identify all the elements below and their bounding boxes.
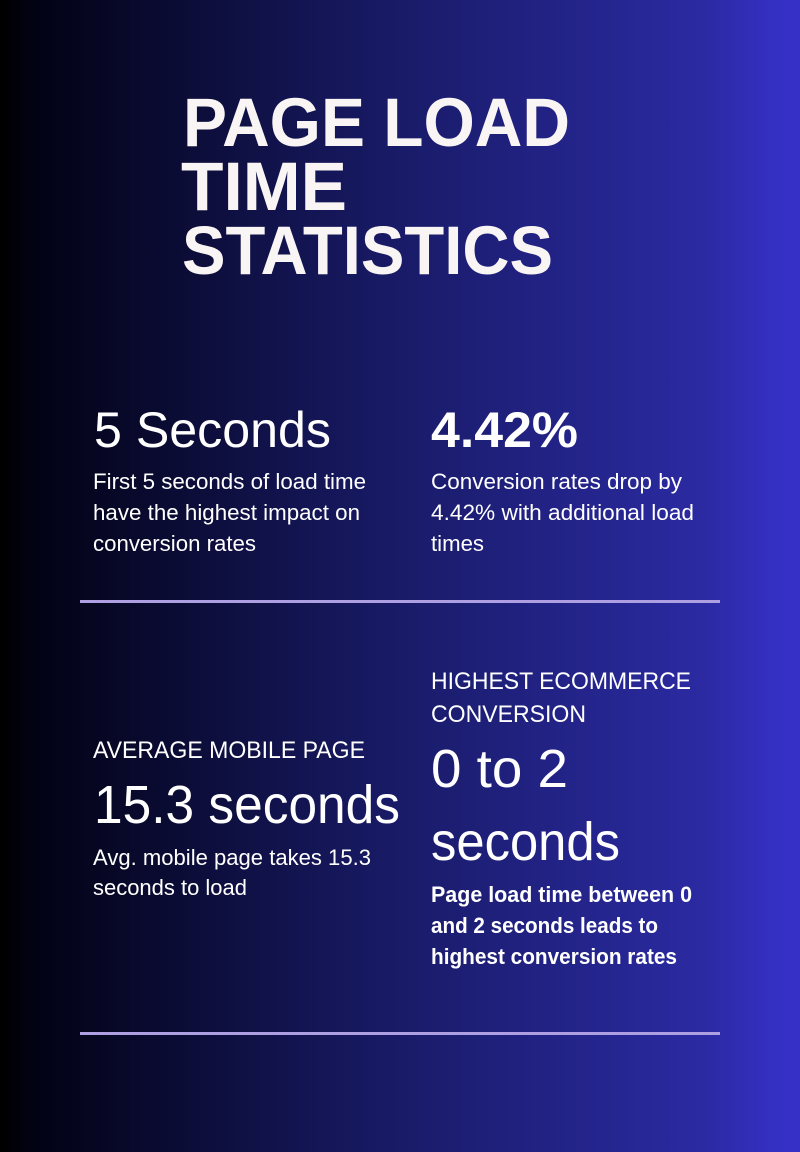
stat value: 0 to 2 seconds: [431, 739, 620, 872]
panel: average mobile page: [93, 737, 400, 900]
label: average mobile page: AVERAGE MOBILE PAGE: [93, 737, 365, 764]
description: first 5 seconds: have the highest impact on: [93, 500, 360, 525]
title: TIME: [181, 148, 347, 225]
description: conversion drop: Conversion rates drop by: [431, 469, 683, 494]
description: best load time: highest conversion rates: [431, 944, 677, 969]
description: conversion drop: 4.42% with additional load: [431, 500, 694, 525]
stat value: 0 to 2 seconds: 0 to 2: [431, 739, 568, 799]
divider: upper: [80, 600, 720, 603]
description: conversion drop: [431, 469, 694, 556]
description: best load time: and 2 seconds leads to: [431, 913, 658, 938]
stat value: 0 to 2 seconds: seconds: [431, 812, 620, 872]
panel: 5 seconds stat: [93, 402, 366, 556]
description: first 5 seconds: First 5 seconds of load time: [93, 469, 366, 494]
description: mobile load: seconds to load: [93, 875, 247, 900]
description: first 5 seconds: [93, 469, 366, 556]
panel: highest ecommerce conversion: [431, 668, 692, 969]
stat value: 15.3 seconds: 15.3 seconds: [94, 775, 400, 835]
title: PAGE LOAD: [183, 84, 570, 161]
title: STATISTICS: [182, 212, 553, 289]
description: first 5 seconds: conversion rates: [93, 531, 256, 556]
description: mobile load: Avg. mobile page takes 15.3: [93, 845, 371, 870]
stat value: 4.42%: 4.42%: [431, 402, 578, 458]
label: highest ecommerce conversion: HIGHEST ECOMMERCE: [431, 668, 691, 695]
description: mobile load: [93, 845, 371, 900]
description: best load time: Page load time between 0: [431, 882, 692, 907]
stat value: 5 Seconds: 5 Seconds: [94, 402, 331, 458]
label: highest ecommerce conversion: CONVERSION: [431, 701, 586, 728]
description: best load time: [431, 882, 692, 969]
panel: 4.42% stat: [431, 402, 694, 556]
label: highest ecommerce conversion: [431, 668, 691, 728]
title: [181, 84, 570, 289]
description: conversion drop: times: [431, 531, 484, 556]
divider: lower: [80, 1032, 720, 1035]
